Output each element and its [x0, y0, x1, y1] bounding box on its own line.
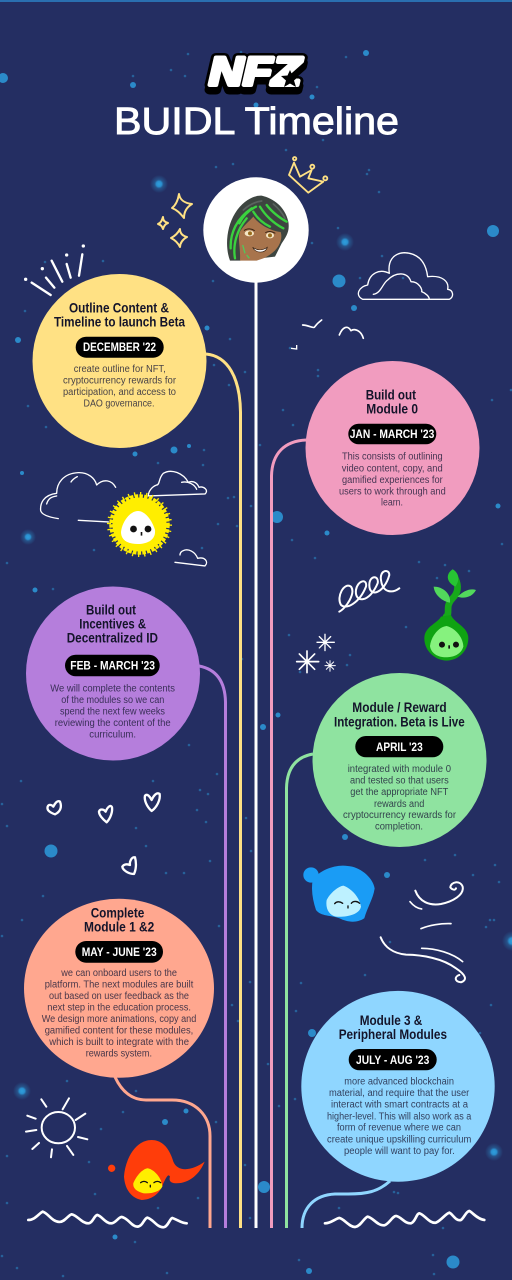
- icon: cloud right: [358, 253, 453, 299]
- logo: NFZ: NFZ: [209, 50, 303, 94]
- body text: [327, 1077, 472, 1157]
- body text: [50, 683, 175, 740]
- heading: [54, 301, 185, 330]
- body text: interact with smart contracts at a: [331, 1100, 468, 1111]
- body text: more advanced blockchain: [344, 1077, 454, 1088]
- body text: video content, copy, and: [342, 463, 443, 474]
- heading: Build out: [86, 602, 136, 617]
- heading: Module 0: [366, 402, 418, 417]
- date pill: JULY - AUG '23: [356, 1055, 429, 1067]
- body text: cryptocurrency rewards for: [63, 376, 177, 386]
- icon: hearts: [47, 793, 160, 874]
- heading: Decentralized ID: [67, 631, 158, 646]
- panel: Feb - March '23: [26, 586, 200, 760]
- panel: Jan - March '23: [306, 361, 480, 535]
- body text: and tested so that users: [350, 776, 449, 786]
- timeline connector: light blue: [302, 1181, 390, 1228]
- heading: [366, 387, 418, 417]
- date pill: APRIL '23: [376, 742, 423, 754]
- body text: rewards system.: [86, 1049, 152, 1060]
- icon: snowflakes: [297, 634, 335, 673]
- body text: learn.: [381, 498, 403, 509]
- timeline connector: salmon: [115, 1077, 210, 1228]
- body text: rewards and: [374, 799, 424, 810]
- body text: users to work through and: [339, 486, 446, 497]
- timeline connector: yellow: [206, 354, 240, 1228]
- panel: May - June '23: [24, 899, 214, 1078]
- timeline connector: purple: [199, 666, 226, 1228]
- panel: April '23: [312, 673, 486, 847]
- icon: birds: [291, 320, 363, 349]
- date pill: [65, 655, 160, 676]
- date pill: FEB - MARCH '23: [70, 660, 155, 672]
- body text: create outline for NFT,: [74, 364, 166, 375]
- body text: material, and require that the user: [329, 1088, 470, 1099]
- body text: which is built to integrate with the: [48, 1037, 189, 1048]
- body text: [42, 968, 196, 1060]
- body text: We design more animations, copy and: [42, 1014, 196, 1025]
- body text: get the appropriate NFT: [350, 787, 448, 798]
- heading: [339, 1013, 447, 1042]
- panel: July - Aug '23: [301, 991, 495, 1182]
- heading: [84, 906, 154, 935]
- body text: spend the next few weeks: [60, 706, 165, 718]
- body text: DAO governance.: [84, 398, 154, 410]
- timeline connector: pink: [272, 440, 306, 1228]
- date pill: [355, 736, 443, 757]
- icon: wind lines: [381, 882, 465, 982]
- timeline connector: green: [286, 754, 313, 1228]
- heading: Module / Reward: [352, 700, 447, 715]
- date pill: [349, 1049, 437, 1070]
- icon: waves right: [325, 1211, 484, 1227]
- heading: Module 3 &: [360, 1013, 423, 1028]
- date pill: DECEMBER '22: [83, 342, 156, 354]
- body text: next step in the education process.: [47, 1003, 191, 1014]
- date pill: [348, 424, 436, 444]
- heading: [67, 602, 158, 646]
- heading: Build out: [366, 387, 416, 402]
- heading: Outline Content &: [69, 301, 169, 316]
- logo: NFZ: NFZ: [209, 55, 303, 99]
- logo: NFZ: NFZ: [209, 50, 303, 94]
- icon: green sprout creature: [424, 569, 476, 661]
- body text: of the modules so we can: [61, 695, 164, 706]
- body text: This consists of outlining: [342, 452, 443, 463]
- icon: red fire creature: [108, 1140, 205, 1200]
- body text: we can onboard users to the: [60, 968, 177, 979]
- body text: [343, 764, 457, 832]
- body text: gamified content for these modules,: [45, 1026, 193, 1037]
- body text: cryptocurrency rewards for: [343, 810, 457, 821]
- icon: yellow sun creature: [109, 494, 170, 555]
- icon: waves left: [28, 1212, 187, 1227]
- heading: Timeline to launch Beta: [54, 315, 185, 330]
- icon: squiggle: [339, 571, 399, 612]
- avatar: [203, 177, 309, 283]
- heading: Module 1 &2: [84, 920, 154, 935]
- body text: curriculum.: [89, 730, 136, 740]
- heading: Integration. Beta is Live: [334, 714, 465, 729]
- body text: integrated with module 0: [348, 764, 451, 775]
- body text: out based on user feedback as the: [49, 991, 189, 1002]
- title: BUIDL Timeline: [114, 101, 399, 143]
- date pill: MAY - JUNE '23: [82, 947, 157, 959]
- body text: create unique upskilling curriculum: [327, 1134, 471, 1145]
- heading: Peripheral Modules: [339, 1027, 447, 1042]
- body text: [63, 364, 177, 410]
- timeline connector: white center: [254, 270, 258, 1228]
- icon: crown: [289, 157, 327, 193]
- icon: clouds left: [41, 471, 207, 566]
- heading: Complete: [91, 906, 144, 921]
- body text: participation, and access to: [63, 387, 176, 398]
- body text: We will complete the contents: [50, 683, 175, 694]
- body text: gamified experiences for: [342, 475, 443, 486]
- panel: December '22: [32, 274, 206, 448]
- body text: higher-level. This will also work as a: [327, 1111, 472, 1122]
- body text: people will want to pay for.: [344, 1146, 455, 1157]
- icon: blue water creature: [303, 866, 375, 922]
- date pill: [75, 941, 163, 963]
- body text: reviewing the content of the: [55, 718, 171, 729]
- heading: [334, 700, 465, 729]
- date pill: [76, 337, 164, 358]
- body text: [339, 452, 446, 509]
- body text: form of revenue where we can: [337, 1123, 461, 1134]
- icon: sun outline: [26, 1098, 87, 1157]
- heading: Incentives &: [79, 617, 146, 632]
- body text: completion.: [375, 822, 423, 832]
- icon: burst lines: [24, 244, 85, 295]
- body text: platform. The next modules are built: [45, 979, 194, 990]
- icon: sparkles: [158, 194, 192, 247]
- date pill: JAN - MARCH '23: [350, 429, 434, 441]
